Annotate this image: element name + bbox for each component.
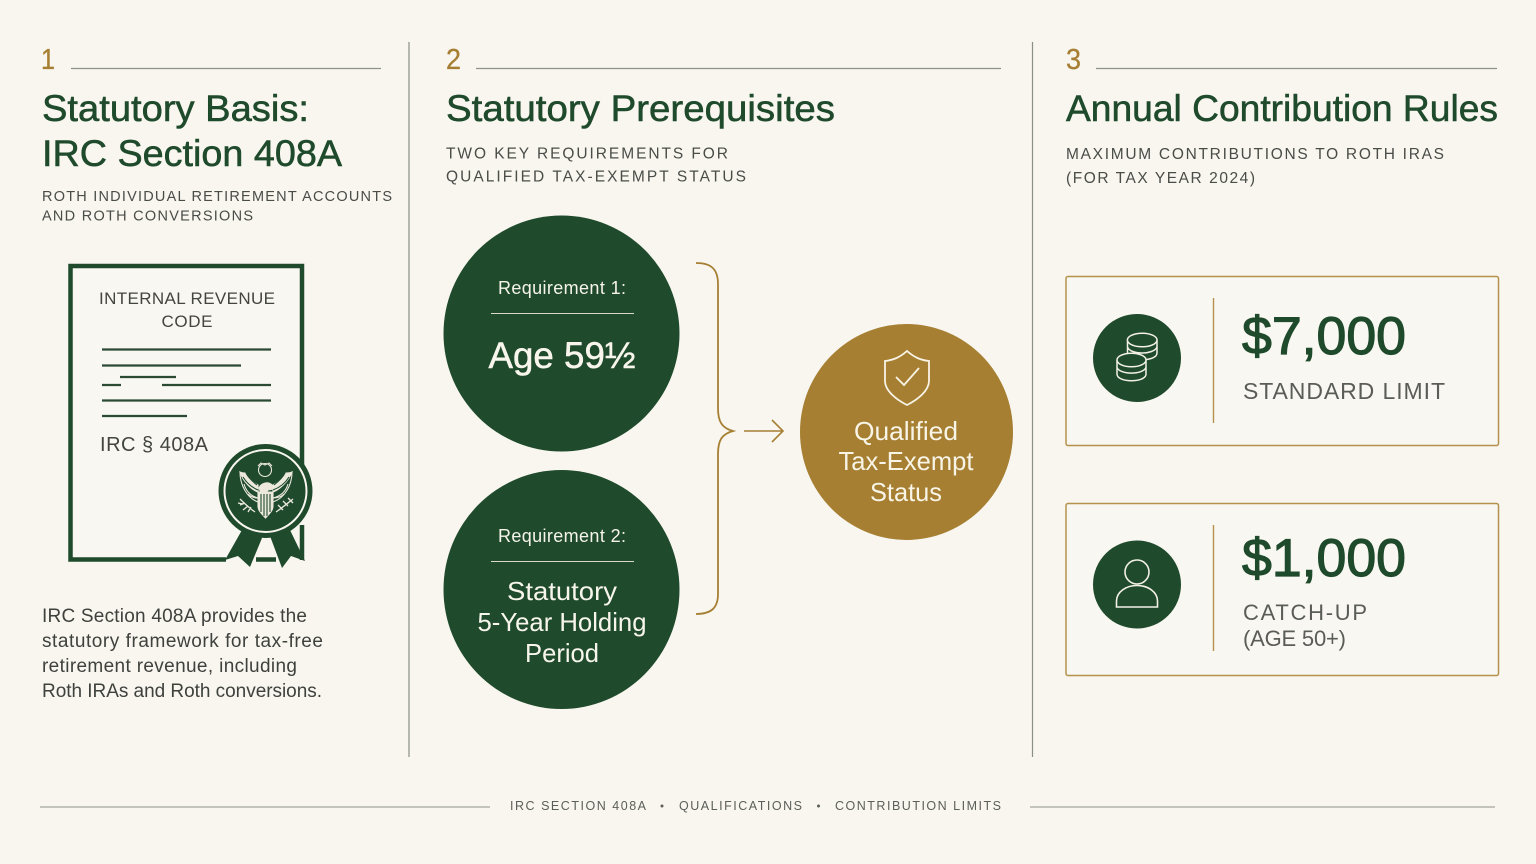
requirement 1 circle: Age 59½ [488, 335, 636, 376]
description: Roth IRAs and Roth conversions. [42, 681, 322, 702]
eagle emblem [238, 463, 293, 518]
requirement 2 circle [444, 470, 680, 709]
panel: statutory prerequisites [444, 44, 1013, 709]
section number 1: 1 [41, 44, 55, 76]
subheading: roth accounts: ROTH INDIVIDUAL RETIREMENT ACCOUNTS [42, 189, 392, 205]
card: standard limit: STANDARD LIMIT [1243, 378, 1445, 404]
document title: INTERNAL REVENUE [99, 289, 275, 308]
seal ribbon [225, 530, 305, 568]
panel: annual contribution rules [1066, 44, 1498, 676]
document title: CODE [162, 312, 212, 331]
subheading: two key requirements: TWO KEY REQUIREMENTS FOR [446, 146, 728, 162]
icon: person [1093, 540, 1181, 628]
footer: IRC SECTION 408A [510, 799, 647, 813]
footer: CONTRIBUTION LIMITS [835, 799, 1001, 813]
outcome circle: qualified status: Status [870, 477, 942, 507]
footer: QUALIFICATIONS [679, 799, 802, 813]
heading: annual contribution rules: Annual Contribution Rules [1066, 88, 1498, 129]
icon: coins [1093, 314, 1181, 402]
description: IRC Section 408A provides the [42, 606, 307, 627]
document illustration [70, 266, 312, 568]
section number 2: 2 [446, 44, 461, 76]
card: catch-up: (AGE 50+) [1243, 626, 1346, 651]
outcome circle: qualified status [800, 324, 1013, 540]
subheading: roth accounts: AND ROTH CONVERSIONS [42, 208, 253, 224]
bracket [696, 263, 733, 614]
outcome circle: qualified status: Tax-Exempt [838, 446, 974, 476]
icon: shield with check [885, 351, 929, 405]
seal medallion [218, 444, 312, 538]
subheading: maximum contributions: (FOR TAX YEAR 2024) [1066, 170, 1255, 187]
heading: statutory basis: IRC Section 408A [42, 133, 342, 174]
requirement 2 circle: 5-Year Holding [478, 607, 646, 637]
requirement 1 circle: Requirement 1: [498, 278, 626, 298]
arrow [744, 420, 783, 442]
heading: statutory basis: Statutory Basis: [42, 88, 309, 129]
requirement 1 circle [444, 216, 680, 452]
card: standard limit [1066, 276, 1498, 446]
panel: statutory basis [41, 44, 392, 702]
document frame [70, 266, 302, 560]
subheading: two key requirements: QUALIFIED TAX-EXEMPT STATUS [446, 168, 746, 186]
description: retirement revenue, including [42, 656, 297, 677]
card: catch-up [1066, 504, 1498, 676]
description: statutory framework for tax-free [42, 631, 323, 652]
citation: IRC § 408A [100, 434, 209, 456]
footer [40, 799, 1495, 813]
requirement 2 circle: Statutory [507, 576, 617, 606]
requirement 2 circle: Period [525, 638, 599, 668]
card: standard limit: $7,000 [1242, 307, 1406, 366]
heading: statutory prerequisites: Statutory Prerequisites [446, 88, 835, 129]
outcome circle: qualified status: Qualified [854, 416, 958, 446]
card: catch-up: $1,000 [1242, 529, 1406, 588]
subheading: maximum contributions: MAXIMUM CONTRIBUTIONS TO ROTH IRAS [1066, 146, 1444, 163]
card: catch-up: CATCH-UP [1243, 600, 1367, 625]
requirement 2 circle: Requirement 2: [498, 526, 626, 546]
document text lines [102, 350, 271, 416]
section number 3: 3 [1066, 44, 1081, 76]
